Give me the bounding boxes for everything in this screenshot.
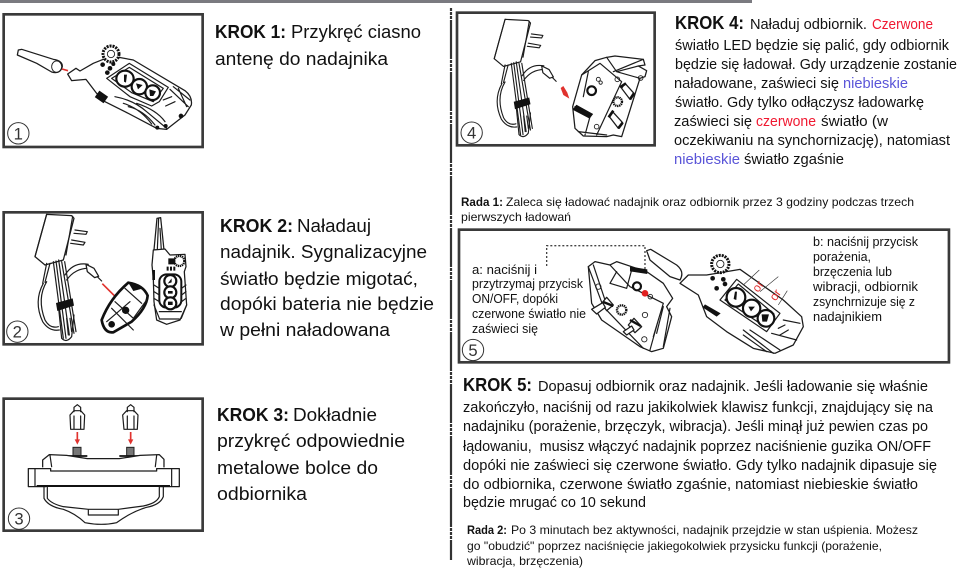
heading and text: step 4: niebieskie: [843, 75, 908, 92]
badge: 5: 5: [468, 341, 478, 360]
tip 1: [461, 195, 914, 224]
heading: step 1: Przykręć ciasno: [291, 22, 421, 42]
heading and text: step 4: czerwone: [756, 113, 816, 130]
heading: step 2: dopóki bateria nie będzie: [220, 294, 434, 314]
heading and text: step 5: będzie mrugać co 10 sekund: [463, 494, 646, 511]
badge: 5: [462, 339, 484, 361]
heading and text: step 5: zakończyło, naciśnij od razu jakikolwiek klawisz funkcji, znajdujący się na: [463, 399, 934, 416]
callouts: button markers: [743, 270, 787, 305]
tip 2: Po 3 minutach bez aktywności, nadajnik przejdzie w stan uśpienia. Możesz: [511, 523, 918, 537]
callout b: porażenia,: [813, 250, 871, 264]
heading: step 2: Naładauj: [297, 216, 371, 236]
badge: 3: [8, 508, 30, 529]
heading and text: step 4: oczekiwaniu na synchornizację), natomiast: [674, 132, 951, 149]
icon: receiver front view: [28, 447, 179, 524]
icon: transmitter upright: [152, 218, 187, 324]
badge: 4: 4: [467, 124, 476, 143]
callout a: zaświeci się: [472, 322, 538, 336]
callout a: a: naciśnij i: [472, 263, 537, 277]
heading and text: step 4: [674, 13, 957, 168]
heading: step 2: w pełni naładowana: [219, 320, 391, 340]
panel 4: charging the receiver: [457, 13, 655, 145]
arrows: down to receiver: [75, 432, 133, 445]
heading and text: step 4: zaświeci się: [674, 113, 752, 130]
callouts: button markers: or: [766, 287, 784, 303]
heading: step 1: [215, 22, 421, 69]
heading and text: step 5: Dopasuj odbiornik oraz nadajnik. Jeśli ładowanie się właśnie: [538, 378, 928, 395]
heading and text: step 5: do odbiornika, czerwone światło zgaśnie, natomiast niebieskie światło: [463, 476, 918, 493]
arrow: antenna to transmitter: [62, 69, 68, 71]
heading and text: step 5: łądowaniu, musisz włączyć nadajnik poprzez naciśnienie guzika ON/OFF: [463, 438, 931, 455]
heading and text: step 4: Czerwone: [872, 16, 933, 33]
badge: 2: 2: [13, 323, 22, 342]
tip 2: go "obudzić" poprzez naciśnięcie jakiegokolwiek przysicku funkcji (porażenie,: [467, 539, 882, 553]
panel 1: transmitter with antenna: [4, 14, 203, 147]
heading: step 3: KROK 3:: [217, 405, 289, 425]
heading: step 2: nadajnik. Sygnalizacyjne: [220, 242, 427, 262]
icon: receiver: [573, 56, 647, 137]
arrow: to charging dock: [102, 284, 115, 296]
callout a: przytrzymaj przycisk: [472, 277, 584, 291]
panel 2: charging the transmitter: [4, 212, 203, 344]
tip 1: Zaleca się ładować nadajnik oraz odbiornik przez 3 godziny podczas trzech: [506, 195, 914, 209]
callouts: button markers: or: [749, 278, 767, 295]
panel 5: pairing receiver and transmitter: [459, 230, 949, 362]
callout b: brzęczenia lub: [813, 265, 892, 279]
heading and text: step 4: światło zgaśnie: [744, 151, 844, 168]
tip 2: wibracja, brzęczenia): [466, 554, 583, 568]
icon: antenna: [17, 49, 62, 73]
callout b: wibracji, odbiornik: [812, 280, 919, 294]
badge: 3: 3: [14, 510, 24, 529]
heading: step 3: odbiornika: [217, 484, 308, 504]
badge: 4: [461, 122, 482, 143]
heading and text: step 5: KROK 5:: [463, 375, 532, 395]
callout a: czerwone światło nie: [472, 307, 586, 321]
panel 3: screwing on contact posts: [4, 399, 203, 531]
tip 1: Rada 1:: [461, 195, 503, 209]
heading and text: step 4: światło (w: [821, 113, 888, 130]
heading and text: step 4: naładowane, zaświeci się: [674, 75, 839, 92]
heading and text: step 4: KROK 4:: [675, 13, 744, 33]
heading: step 1: KROK 1:: [215, 22, 286, 42]
arrow: to receiver: [561, 86, 569, 99]
icon: charger: [35, 214, 102, 340]
heading: step 3: Dokładnie: [293, 405, 377, 425]
heading: step 2: światło będzie migotać,: [220, 269, 418, 289]
callout b: nadajnikiem: [813, 310, 882, 324]
heading and text: step 5: nadajniku (porażenie, brzęczyk, wibracja). Jeśli minął już pewien czas po: [463, 418, 928, 435]
heading: step 3: [217, 405, 405, 504]
tip 2: Rada 2:: [467, 523, 507, 537]
heading and text: step 5: dopóki nie zaświeci się czerwone światło. Gdy tylko nadajnik dipasuje się: [463, 457, 937, 474]
heading and text: step 4: światło. Gdy tylko odłączysz ładowarkę: [675, 94, 924, 111]
heading: step 1: antenę do nadajnika: [215, 49, 389, 69]
badge: 1: [8, 123, 29, 144]
badge: 1: 1: [14, 124, 23, 143]
heading and text: step 5: [463, 375, 937, 511]
icon: charger: [494, 19, 556, 137]
heading: step 3: metalowe bolce do: [217, 458, 378, 478]
icon: metal posts: [70, 405, 138, 429]
icon: transmitter: [647, 249, 803, 353]
dotted connector: [547, 246, 645, 272]
callout a: ON/OFF, dopóki: [472, 292, 558, 306]
tip 1: pierwszych ładowań: [461, 210, 571, 224]
callout b: [812, 235, 919, 324]
tip 2: [466, 523, 918, 568]
icon: receiver: [588, 262, 673, 352]
heading: step 3: przykręć odpowiednie: [217, 431, 405, 451]
heading and text: step 4: światło LED będzie się palić, gdy odbiornik: [675, 37, 949, 54]
heading and text: step 4: niebieskie: [674, 151, 740, 168]
icon: charging dock: [102, 283, 148, 332]
heading and text: step 4: Naładuj odbiornik.: [750, 16, 867, 33]
heading: step 2: KROK 2:: [220, 216, 293, 236]
callout b: zsynchrnizuje się z: [813, 295, 915, 309]
callout a: [472, 263, 586, 336]
callout b: b: naciśnij przycisk: [813, 235, 919, 249]
badge: 2: [7, 321, 28, 342]
heading: step 2: [219, 216, 434, 340]
icon: transmitter body: [68, 46, 192, 130]
